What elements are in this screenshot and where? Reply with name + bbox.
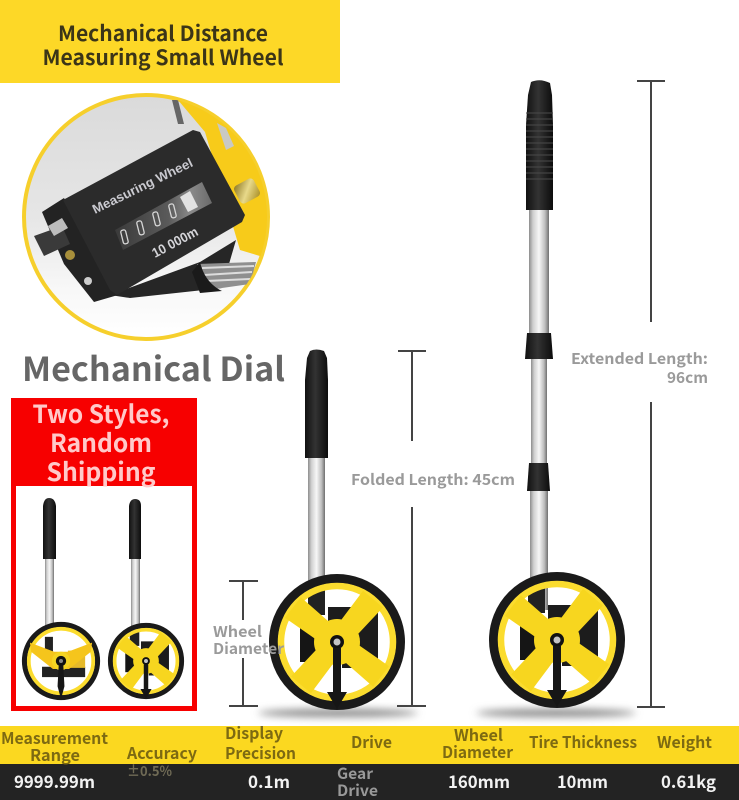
column: accuracy: ±0.5% [127,761,172,781]
dimension: wheel diameter [213,581,284,706]
middle pole [531,358,547,466]
values: 0.1m [248,768,290,793]
specification table [0,720,739,800]
photo: mechanical dial close-up in circle [24,95,280,339]
folded pole [308,458,325,583]
dimension: extended length: 96cm [667,367,708,388]
title banner [0,0,340,83]
values: 160mm [448,768,510,793]
extended wheel [494,576,620,707]
column: tire thickness: Tire Thickness [529,729,637,753]
values: 10mm [557,768,608,793]
column: wheel diameter [442,722,513,763]
column: wheel diameter: Diameter [442,739,513,763]
column: display precision: Display [225,720,283,744]
values: 9999.99m [14,768,95,793]
dimension: wheel diameter: Wheel [213,621,262,642]
folded grip [305,350,328,458]
panel: two styles, random shipping [11,395,197,711]
folded wheel [274,578,400,709]
values: Gear [337,762,373,784]
ribbed grip [526,80,553,210]
title banner: Measuring Small Wheel [42,42,284,72]
panel heading [32,395,170,489]
panel heading: Shipping [46,453,156,489]
title banner: Mechanical Distance [58,18,268,48]
dimension: folded length: Folded Length: 45cm [351,469,515,490]
style one: Y-spoke wheel [24,498,98,699]
values [14,762,716,800]
collar bottom [527,463,550,491]
column: accuracy: Accuracy [126,740,197,764]
header band [0,726,739,764]
dimension: extended length: Extended Length: [571,348,708,369]
column: wheel diameter: Wheel [454,722,503,746]
column: measurement range: Measurement [1,725,108,749]
column: weight: Weight [657,729,712,753]
column: display precision [225,720,296,764]
dimension: extended length [571,81,708,707]
column: drive: Drive [351,729,392,753]
heading: Mechanical Dial: Mechanical Dial [22,343,285,391]
values band [0,764,739,800]
photo: mechanical dial close-up in circle: 10 000m [149,224,201,261]
dimension: folded length [351,351,515,706]
dimension: wheel diameter: Diameter [213,638,284,659]
extended wheel product [476,80,636,717]
column: measurement range [1,725,108,766]
panel heading: Random [50,424,152,460]
lower pole [530,490,548,610]
upper pole [529,210,549,335]
column: measurement range: Range [30,742,80,766]
column: display precision: Precision [225,740,296,764]
photo: mechanical dial close-up in circle: Measuring Wheel [90,155,195,217]
folded wheel product [258,350,418,717]
style two: X-spoke wheel [110,499,182,699]
column: accuracy [126,740,197,781]
collar top [525,333,553,359]
panel heading: Two Styles, [32,395,170,431]
ground shadow [258,709,418,717]
values: 0.61kg [661,768,716,793]
ground shadow [476,709,636,717]
